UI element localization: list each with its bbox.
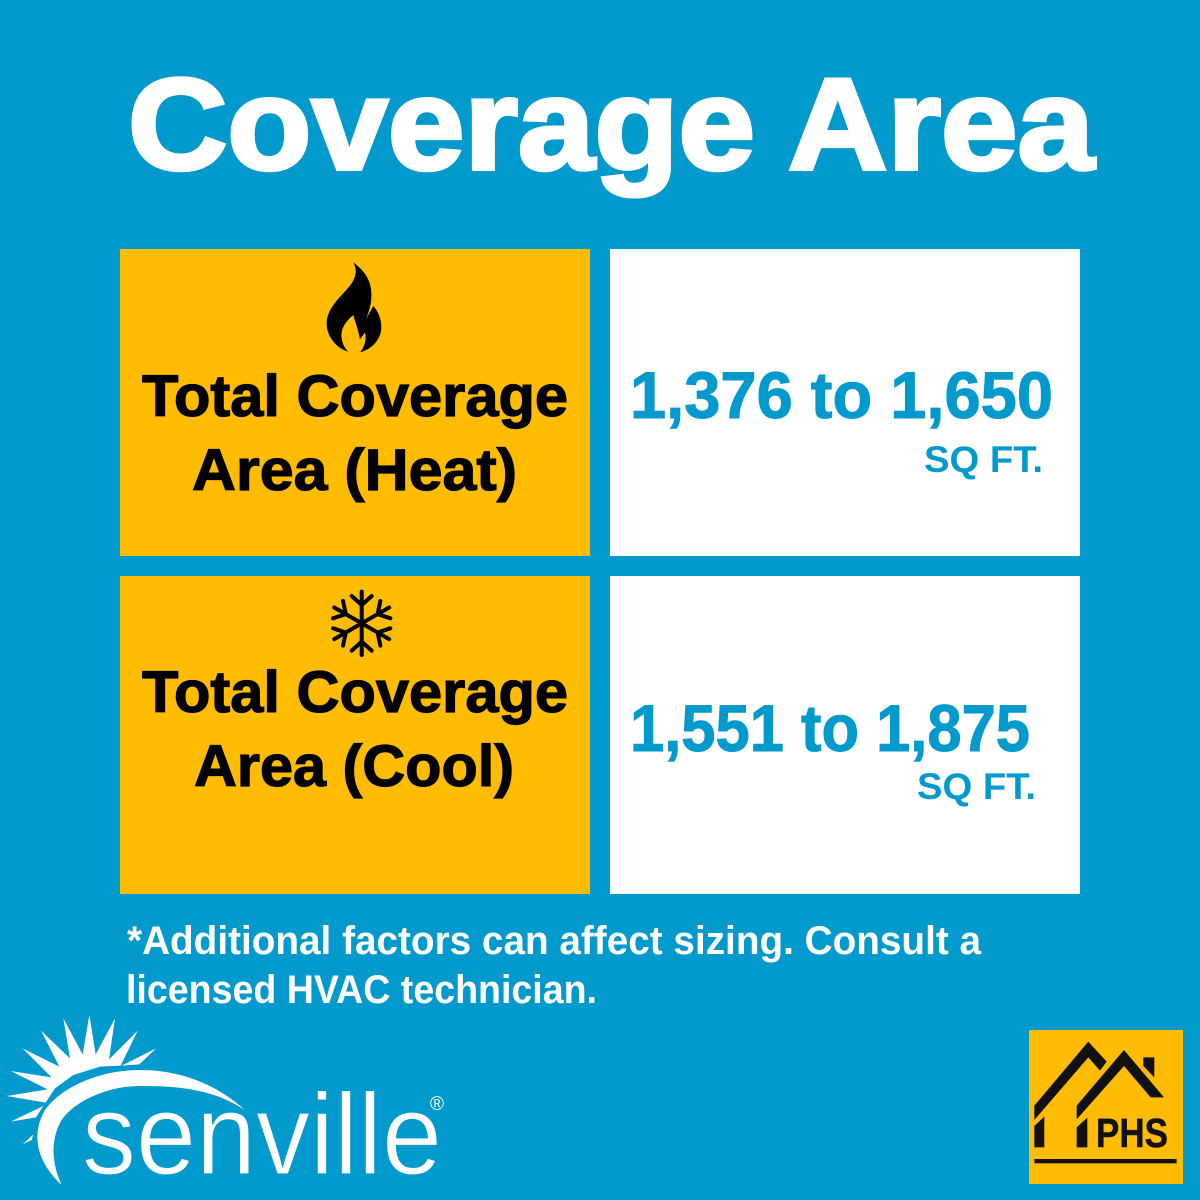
cool label text <box>142 660 568 799</box>
footnote: licensed HVAC technician. <box>126 968 597 1012</box>
heat unit: SQ FT. <box>924 439 1043 480</box>
heat label text <box>142 364 568 503</box>
title: Coverage Area <box>128 51 1096 197</box>
panel: heat value <box>610 249 1080 556</box>
icon: houses <box>1034 1042 1177 1163</box>
cool label text: Area (Cool) <box>194 734 514 799</box>
heat label text: Total Coverage <box>142 364 568 429</box>
icon: sun rays and swoosh <box>7 1015 245 1185</box>
panel: cool value <box>610 576 1080 894</box>
icon: snowflake <box>329 592 394 655</box>
senville wordmark: senville <box>82 1071 442 1199</box>
registered mark: ® <box>430 1094 444 1115</box>
icon: flame <box>327 262 381 352</box>
cool range number: 1,551 to 1,875 <box>630 691 1030 765</box>
heat label text: Area (Heat) <box>192 438 517 503</box>
panel: heat label <box>120 249 590 556</box>
logo: PHS <box>1029 1030 1183 1184</box>
logo: senville <box>7 1015 444 1199</box>
footnote: *Additional factors can affect sizing. Consult a <box>127 919 982 963</box>
heat range number: 1,376 to 1,650 <box>630 358 1053 432</box>
cool label text: Total Coverage <box>142 660 568 725</box>
footnote <box>126 919 982 1012</box>
cool unit: SQ FT. <box>917 766 1036 807</box>
panel: cool label <box>120 576 590 894</box>
PHS text: PHS <box>1096 1110 1168 1156</box>
